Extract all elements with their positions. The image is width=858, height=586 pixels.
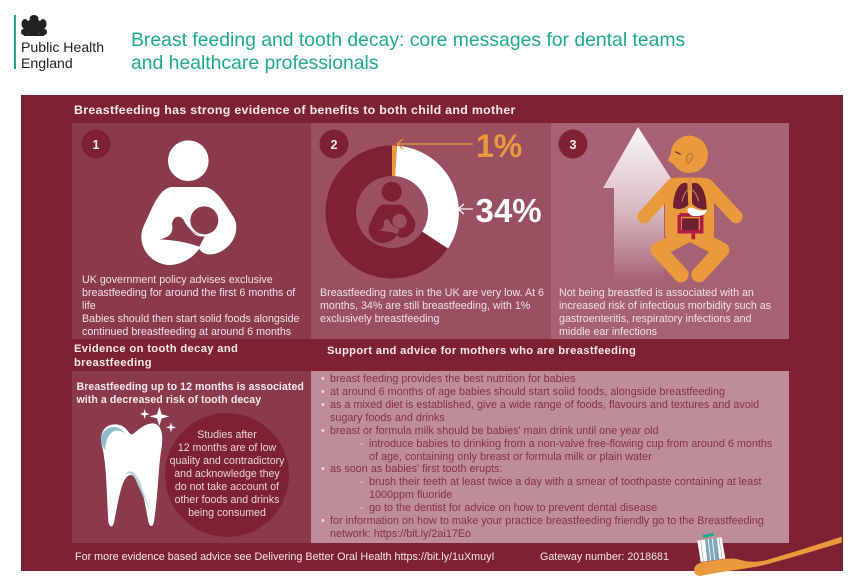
panel 1: policy bbox=[72, 123, 311, 339]
heading: evidence on tooth decay: Evidence on tooth decay and bbox=[74, 343, 238, 355]
logo: Public Health England bbox=[14, 15, 104, 71]
advice list: • bbox=[321, 463, 325, 475]
advice list: breast or formula milk should be babies' main drink until one year old bbox=[330, 425, 659, 437]
callout circle: studies: Studies after bbox=[197, 429, 257, 441]
logo: Public Health England: England bbox=[21, 55, 73, 71]
text: rates: exclusively breastfeeding bbox=[320, 313, 439, 325]
label: 34%: 34% bbox=[476, 192, 542, 229]
main maroon panel bbox=[21, 95, 843, 571]
advice list: • bbox=[321, 425, 325, 437]
text: policy: continued breastfeeding at around 6 months bbox=[82, 326, 291, 338]
panel: support and advice bbox=[311, 371, 789, 543]
heading: benefits: Breastfeeding has strong evidence of benefits to both child and mother bbox=[74, 103, 516, 117]
callout circle: studies: and acknowledge they bbox=[174, 468, 280, 480]
icon: tooth with sparkles bbox=[101, 407, 176, 526]
number badge 1: 1 bbox=[93, 138, 100, 152]
footer: gateway number: Gateway number: 2018681 bbox=[540, 551, 669, 563]
number badge 1 bbox=[82, 130, 110, 158]
panel 3: risks bbox=[551, 123, 789, 339]
title: and healthcare professionals bbox=[131, 52, 379, 74]
icon: toothbrush bbox=[694, 533, 842, 576]
arrow: 34% bbox=[458, 204, 473, 214]
callout circle: studies: being consumed bbox=[188, 507, 266, 519]
advice list: • bbox=[321, 399, 325, 411]
advice list: as soon as babies' first tooth erupts: bbox=[330, 463, 503, 475]
text: rates: months, 34% are still breastfeeding, with 1% bbox=[320, 300, 531, 312]
text: policy: Babies should then start solid foods alongside bbox=[82, 313, 300, 325]
advice list: at around 6 months of age babies should start solid foods, alongside breastfeeding bbox=[330, 386, 725, 398]
text: rates bbox=[320, 287, 544, 325]
icon: breastfeeding mother small bbox=[369, 182, 415, 243]
advice list: breast feeding provides the best nutrition for babies bbox=[330, 373, 576, 385]
text: policy: breastfeeding for around the first 6 months of bbox=[82, 287, 295, 299]
advice list: as a mixed diet is established, give a wide range of foods, flavours and textures and avoid bbox=[330, 399, 759, 411]
callout heading: with a decreased risk of tooth decay bbox=[76, 394, 261, 406]
label: 1%: 1% bbox=[476, 128, 522, 164]
title: Breast feeding and tooth decay: core messages for dental teams bbox=[131, 29, 685, 51]
advice list: brush their teeth at least twice a day with a smear of toothpaste containing at least bbox=[369, 476, 762, 488]
callout circle: studies bbox=[165, 413, 289, 537]
text: policy: life bbox=[82, 300, 96, 312]
advice list: • bbox=[321, 373, 325, 385]
advice list: - bbox=[360, 438, 364, 450]
text: risks bbox=[559, 287, 771, 338]
number badge 3: 3 bbox=[570, 138, 577, 152]
advice list: network: https://bit.ly/2ai17Eo bbox=[330, 528, 471, 540]
arrow: increased risk bbox=[603, 127, 672, 282]
advice list: • bbox=[321, 515, 325, 527]
text: risks: Not being breastfed is associated with an bbox=[559, 287, 754, 299]
number badge 3 bbox=[558, 130, 588, 158]
intestines bbox=[679, 215, 702, 239]
advice list: for information on how to make your practice breastfeeding friendly go to the Breastfeeding bbox=[330, 515, 764, 527]
callout circle: studies: do not take account of bbox=[175, 481, 279, 493]
panel: tooth decay evidence bbox=[72, 371, 311, 543]
callout circle: studies: other foods and drinks bbox=[175, 494, 279, 506]
logo: Public Health England: Public Health bbox=[21, 39, 104, 55]
title bbox=[131, 29, 685, 74]
advice list: - bbox=[360, 502, 364, 514]
callout circle: studies: 12 months are of low bbox=[178, 442, 277, 454]
icon: baby with organs bbox=[644, 136, 736, 275]
advice list: • bbox=[321, 386, 325, 398]
advice list: introduce babies to drinking from a non-valve free-flowing cup from around 6 months bbox=[369, 438, 773, 450]
lungs bbox=[673, 183, 707, 209]
heading: evidence on tooth decay bbox=[74, 343, 238, 369]
callout heading bbox=[76, 381, 304, 406]
advice list: of age, containing only breast or formula milk or plain water bbox=[369, 451, 652, 463]
icon: royal crest bbox=[21, 15, 47, 36]
sparkles bbox=[140, 407, 176, 432]
advice list: - bbox=[360, 476, 364, 488]
advice list: 1000ppm fluoride bbox=[369, 489, 452, 501]
number badge 2: 2 bbox=[331, 138, 338, 152]
text: risks: gastroenteritis, respiratory infections and bbox=[559, 313, 752, 325]
advice list: sugary foods and drinks bbox=[330, 412, 445, 424]
panel 2: rates bbox=[311, 123, 551, 339]
text: risks: increased risk of infectious morbidity such as bbox=[559, 300, 771, 312]
callout circle: studies: quality and contradictory bbox=[170, 455, 285, 467]
text: risks: middle ear infections bbox=[559, 326, 657, 338]
text: policy: UK government policy advises exclusive bbox=[82, 274, 273, 286]
arrow: 1% bbox=[397, 139, 473, 149]
footer: more evidence: For more evidence based advice see Delivering Better Oral Health https://bit.ly/1uXmuyI bbox=[75, 551, 494, 563]
advice list bbox=[321, 373, 773, 540]
heading: support and advice: Support and advice for mothers who are breastfeeding bbox=[327, 345, 636, 357]
advice list: go to the dentist for advice on how to prevent dental disease bbox=[369, 502, 657, 514]
text: rates: Breastfeeding rates in the UK are very low. At 6 bbox=[320, 287, 544, 299]
callout heading: Breastfeeding up to 12 months is associated bbox=[76, 381, 304, 393]
stomach bbox=[687, 208, 707, 216]
number badge 2 bbox=[320, 130, 348, 158]
donut chart bbox=[325, 146, 459, 278]
icon: breastfeeding mother bbox=[141, 140, 236, 265]
text: policy bbox=[82, 274, 300, 338]
heading: evidence on tooth decay: breastfeeding bbox=[74, 357, 152, 369]
